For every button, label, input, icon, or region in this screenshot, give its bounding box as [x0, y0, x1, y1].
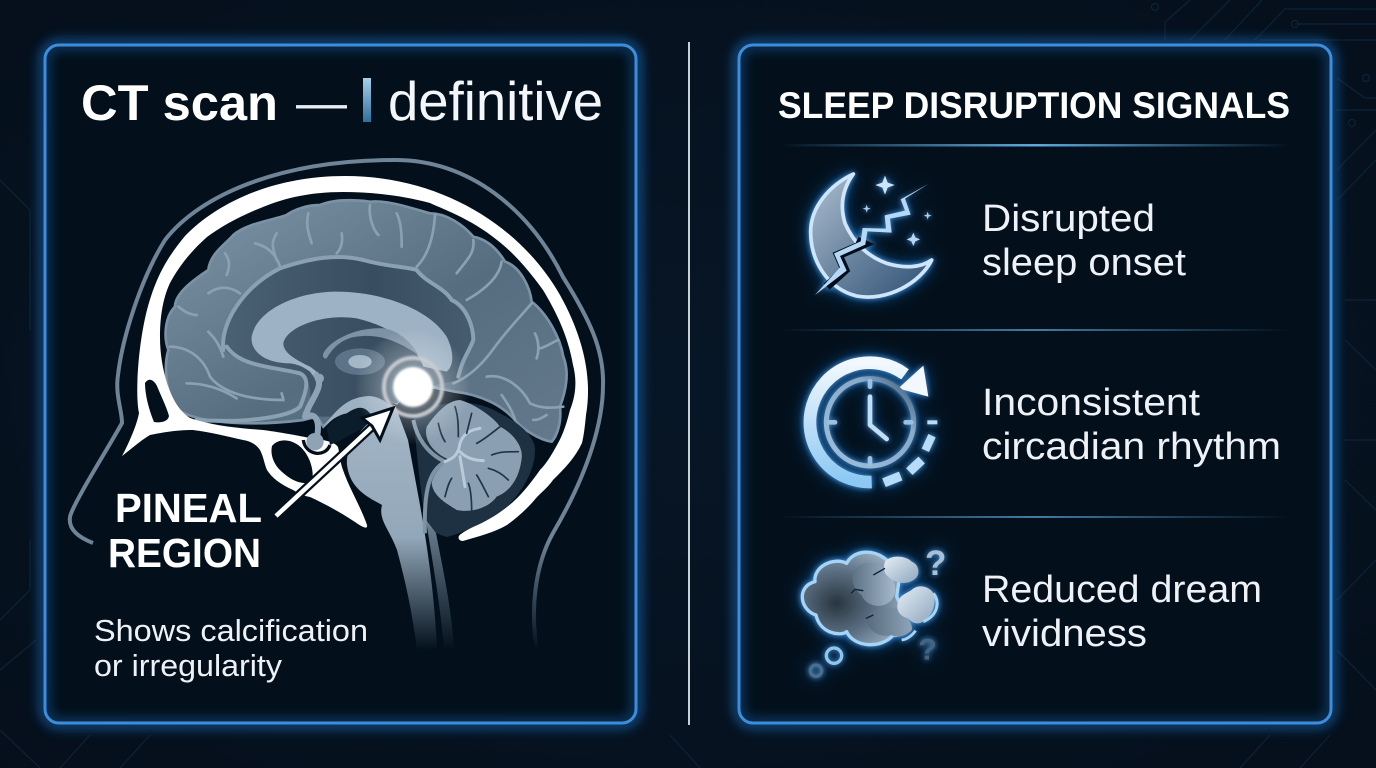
- heading: CT scan definitive: [81, 70, 603, 132]
- signal: reduced dream vividness: [802, 544, 1262, 676]
- icon: fragmenting thought cloud: [802, 544, 946, 676]
- heading: sleep disruption signals: SLEEP DISRUPTION SIGNALS: [778, 85, 1290, 126]
- icon: cracked moon: [811, 174, 932, 297]
- caption: Shows calcification: [94, 613, 368, 648]
- text: disrupted sleep onset: Disrupted: [982, 198, 1155, 240]
- arrow: [276, 408, 393, 516]
- cerebellum pocket: [413, 402, 535, 537]
- brain scan illustration: [70, 160, 603, 650]
- white matter: [224, 257, 473, 417]
- brainstem: [347, 405, 454, 650]
- dark pocket: [327, 407, 377, 445]
- signal: disrupted sleep onset: [811, 174, 1186, 297]
- thalamus: [335, 348, 385, 375]
- center divider: [688, 42, 690, 725]
- heading: CT scan definitive: definitive: [388, 70, 603, 132]
- text: inconsistent circadian rhythm: Inconsistent: [982, 382, 1200, 424]
- text: inconsistent circadian rhythm: circadian rhythm: [982, 426, 1281, 468]
- text: reduced dream vividness: [982, 569, 1262, 655]
- caption: [94, 613, 368, 683]
- hypothalamus and pituitary: [305, 373, 319, 443]
- icon: fragmenting thought cloud: ?: [918, 633, 937, 666]
- icon: fragmenting thought cloud: ?: [925, 544, 946, 583]
- icon: clock with broken arrow: [810, 363, 937, 483]
- frontal sinus: [145, 380, 169, 422]
- pineal glow: [355, 329, 471, 445]
- text: disrupted sleep onset: sleep onset: [982, 242, 1186, 284]
- cerebrum: [166, 200, 567, 442]
- text: disrupted sleep onset: [982, 198, 1186, 284]
- label: pineal region: REGION: [108, 530, 261, 576]
- caption: or irregularity: [94, 648, 283, 683]
- signal: inconsistent circadian rhythm: [810, 363, 1281, 483]
- skull: [122, 176, 588, 541]
- heading: CT scan definitive: CT scan: [81, 75, 278, 131]
- text: inconsistent circadian rhythm: [982, 382, 1281, 468]
- heading: CT scan definitive: —: [296, 74, 347, 131]
- text: reduced dream vividness: vividness: [982, 613, 1147, 655]
- label: pineal region: PINEAL: [115, 485, 262, 531]
- cerebellum: [426, 400, 522, 511]
- sphenoid sinus: [271, 440, 313, 483]
- text: reduced dream vividness: Reduced dream: [982, 569, 1262, 611]
- head outline: [70, 160, 603, 650]
- panel: sleep disruption signals: [738, 44, 1332, 724]
- fornix: [323, 328, 418, 359]
- label: pineal region: [108, 485, 262, 576]
- panel: CT scan: [44, 44, 637, 724]
- corpus callosum: [252, 292, 452, 383]
- sulci: [170, 205, 563, 421]
